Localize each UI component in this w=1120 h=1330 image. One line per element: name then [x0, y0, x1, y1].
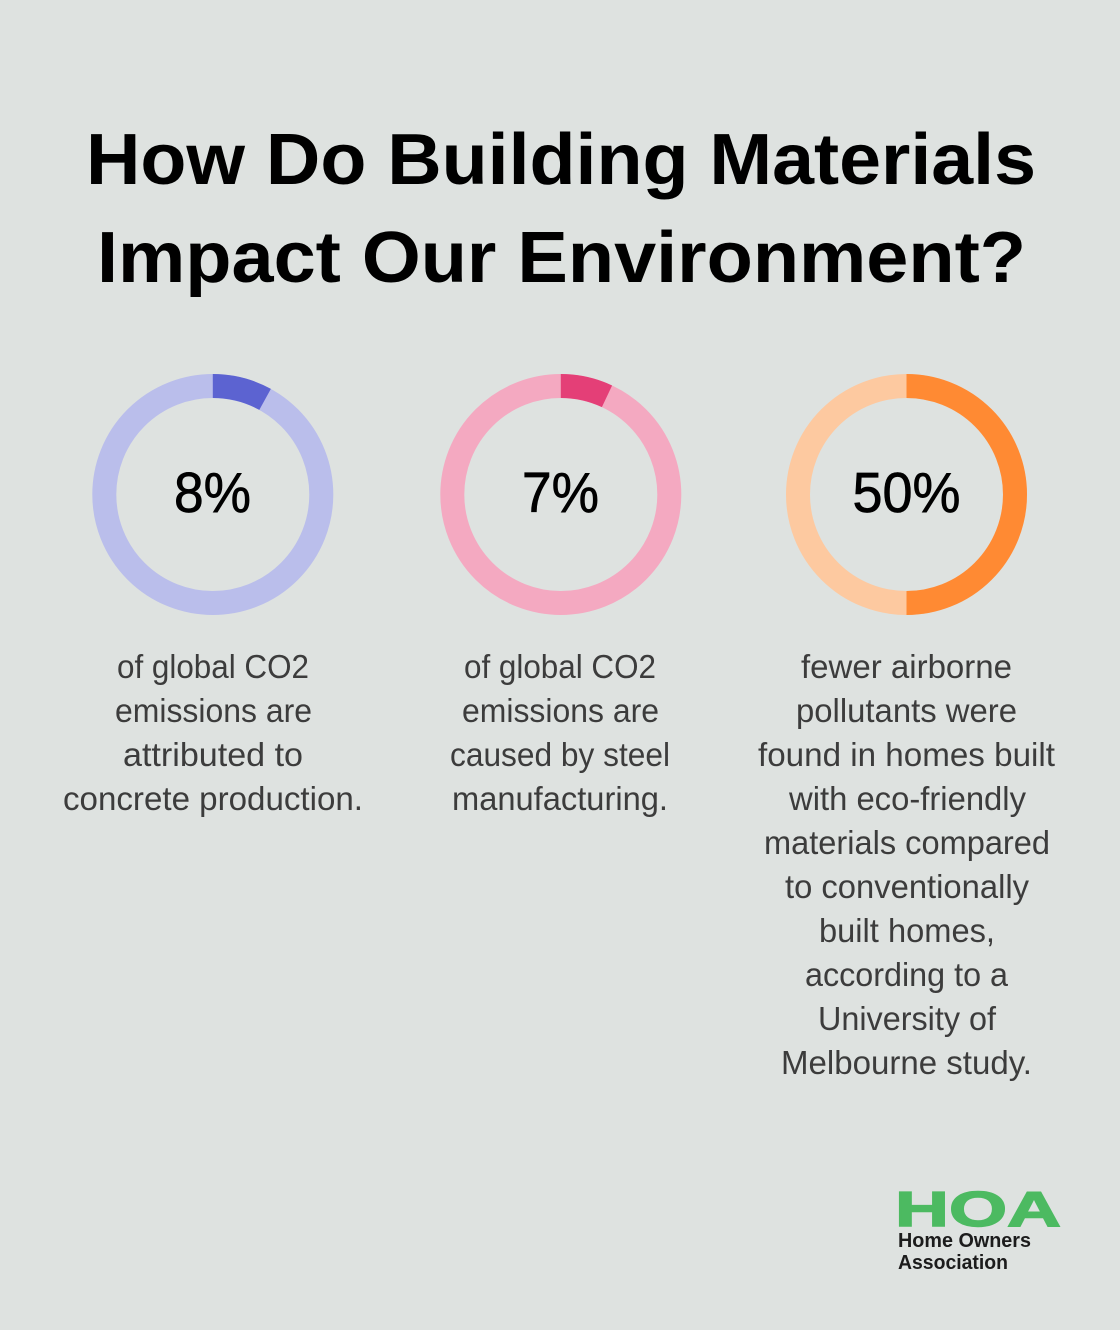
text: concrete description: emissions are: [115, 692, 312, 729]
text: eco-friendly description: found in homes built: [758, 736, 1055, 773]
logo: HOA Home Owners Association: Home Owners: [898, 1230, 1031, 1252]
text: eco-friendly description: with eco-friendly: [788, 780, 1026, 817]
donut chart: 8%: [104, 386, 321, 603]
stat: 50%: 50%: [852, 461, 960, 525]
stat: 7%: 7%: [522, 461, 599, 525]
donut chart: 50%: [798, 386, 1015, 603]
text: eco-friendly description: to conventionally: [785, 868, 1029, 905]
text: concrete description: [63, 648, 363, 817]
text: steel description: emissions are: [462, 692, 659, 729]
title: [86, 120, 1036, 298]
stat: 8%: 8%: [174, 461, 251, 525]
text: concrete description: attributed to: [123, 736, 303, 773]
text: eco-friendly description: according to a: [805, 956, 1009, 993]
text: steel description: of global CO2: [464, 648, 656, 685]
logo: HOA Home Owners Association: HOA: [895, 1183, 1061, 1237]
text: concrete description: concrete production.: [63, 780, 363, 817]
text: eco-friendly description: built homes,: [819, 912, 995, 949]
text: steel description: caused by steel: [450, 736, 670, 773]
text: eco-friendly description: pollutants were: [796, 692, 1017, 729]
logo: HOA Home Owners Association: [895, 1183, 1061, 1274]
text: steel description: manufacturing.: [452, 780, 668, 817]
panel: concrete 8%: [63, 386, 363, 817]
text: eco-friendly description: [758, 648, 1055, 1081]
text: concrete description: of global CO2: [117, 648, 309, 685]
text: steel description: [450, 648, 670, 817]
text: eco-friendly description: materials compared: [764, 824, 1050, 861]
logo: HOA Home Owners Association: Association: [898, 1252, 1008, 1274]
panel: eco-friendly 50%: [758, 386, 1055, 1081]
title: How Do Building Materials: [86, 120, 1036, 200]
title: Impact Our Environment?: [97, 218, 1026, 298]
donut chart: 7%: [452, 386, 669, 603]
text: eco-friendly description: University of: [818, 1000, 997, 1037]
text: eco-friendly description: fewer airborne: [801, 648, 1012, 685]
panel: steel 7%: [450, 386, 670, 817]
text: eco-friendly description: Melbourne study.: [781, 1044, 1032, 1081]
